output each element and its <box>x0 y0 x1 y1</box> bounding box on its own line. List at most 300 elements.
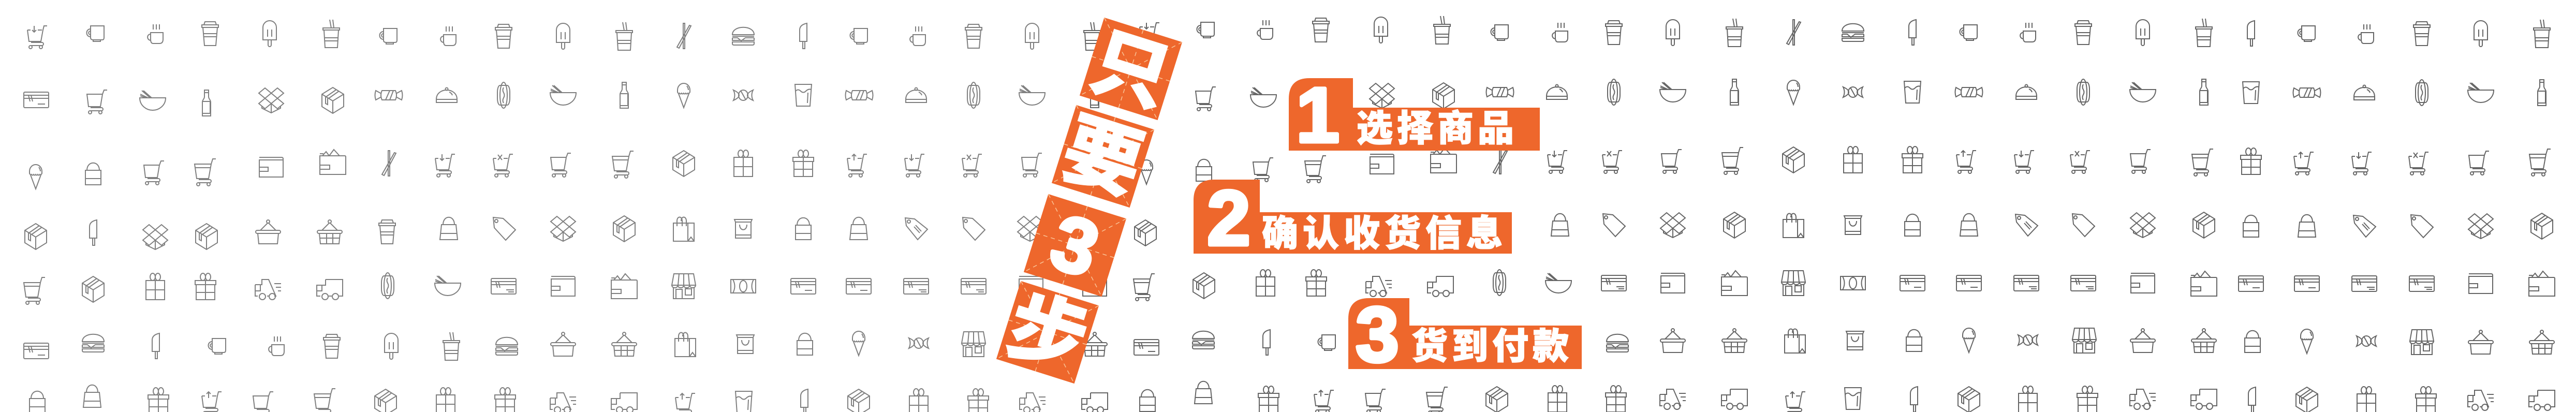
icon: grid basket <box>1722 329 1747 352</box>
icon: card <box>2409 276 2434 291</box>
icon: straw cup <box>616 22 632 50</box>
icon: bag <box>85 163 101 185</box>
icon: open box <box>1660 213 1685 238</box>
icon: card <box>1900 275 1925 291</box>
icon: pouch <box>734 219 752 238</box>
icon: cart <box>2130 150 2151 173</box>
icon: glass <box>735 391 752 412</box>
icon: cart <box>87 90 107 114</box>
icon: coffee <box>440 26 456 46</box>
icon: basket <box>2468 330 2493 354</box>
icon: cart up <box>2294 152 2314 175</box>
icon: knife <box>800 23 807 49</box>
icon: ice cream <box>852 331 865 356</box>
icon: ice cream <box>1963 328 1975 352</box>
icon: box <box>375 389 396 412</box>
icon: lined tag <box>2015 214 2038 236</box>
icon: bag <box>796 218 811 240</box>
icon: tapered bag <box>1960 214 1978 236</box>
icon: mug <box>208 339 226 354</box>
icon: box <box>848 389 870 412</box>
icon: tag <box>1603 214 1625 237</box>
icon: box <box>82 276 104 302</box>
icon: lined tag <box>2353 215 2376 237</box>
icon: large cart <box>2192 149 2213 176</box>
icon: gift with lid <box>195 273 216 300</box>
icon: fast truck <box>2468 390 2494 410</box>
icon: truck <box>317 279 343 300</box>
icon: gift with lid <box>1258 386 1279 412</box>
icon: cart <box>253 392 273 412</box>
icon: small candy <box>1843 87 1863 97</box>
icon: full wallet <box>2191 271 2217 296</box>
icon: knife <box>1909 20 1916 45</box>
icon: bag <box>1140 390 1155 411</box>
icon: cart down <box>905 154 924 177</box>
icon: paper bag <box>1783 213 1804 238</box>
icon: small candy <box>2018 335 2038 345</box>
title tile: 3 <box>1023 192 1127 299</box>
icon: card <box>961 278 986 294</box>
icon: straw cup <box>2196 19 2212 47</box>
icon: mug <box>380 28 397 44</box>
icon: gift <box>1548 386 1567 412</box>
icon: knife <box>2248 387 2256 412</box>
icon: hot dog <box>2077 79 2089 105</box>
icon: burger <box>1842 24 1864 41</box>
icon: chopsticks <box>1493 149 1507 174</box>
icon: popsicle <box>2474 21 2487 47</box>
icon: burger <box>496 337 518 355</box>
icon: paper bag <box>673 217 694 241</box>
icon: basket <box>2130 329 2155 352</box>
icon: knife <box>1263 330 1270 355</box>
icon: wallet <box>1019 276 1043 296</box>
icon: grid basket <box>2529 330 2554 354</box>
icon: candy <box>2293 88 2321 97</box>
icon: box <box>673 151 695 176</box>
icon: gift with lid <box>148 388 169 412</box>
icon: gift <box>436 388 455 412</box>
step 2 number: 2 <box>1207 174 1250 261</box>
icon: coffee <box>2020 23 2036 42</box>
icon: bag <box>797 333 813 355</box>
icon: card <box>846 278 871 294</box>
icon: to-go cup <box>379 220 395 244</box>
icon: bowl <box>1019 85 1045 105</box>
icon: cart down <box>27 26 47 49</box>
icon: truck <box>1427 276 1453 297</box>
icon: box <box>1783 147 1804 173</box>
icon: store <box>1782 271 1805 296</box>
icon: gift with lid <box>793 150 814 176</box>
icon: candy <box>1955 87 1982 97</box>
icon: cart up <box>202 392 222 412</box>
icon: pouch <box>1844 216 1862 234</box>
icon: card <box>904 278 929 294</box>
step 3 banner <box>1348 291 1582 378</box>
icon: bowl <box>435 276 461 296</box>
icon: full wallet <box>1431 148 1456 173</box>
icon: mug <box>1960 25 1977 40</box>
icon: mug <box>850 28 867 44</box>
icon: hot dog <box>381 273 394 299</box>
icon: bottle <box>1730 79 1739 105</box>
icon: basket <box>551 332 576 356</box>
icon: knife <box>801 389 808 412</box>
icon: bowl <box>1660 82 1686 102</box>
icon: open box <box>143 225 168 249</box>
icon: bowl <box>2130 82 2156 102</box>
icon: bag <box>1196 159 1212 181</box>
icon: large cart <box>612 151 634 178</box>
icon: ice cream <box>1787 80 1800 105</box>
icon: popsicle <box>1666 20 1680 46</box>
icon: to-go cup <box>965 24 982 48</box>
icon: fast truck <box>255 279 281 300</box>
icon: box <box>2193 212 2215 238</box>
icon: to-go cup <box>202 22 218 46</box>
icon: gift <box>1256 270 1275 296</box>
icon: wallet <box>259 157 283 177</box>
icon: small candy <box>2357 336 2376 346</box>
icon: store <box>962 332 985 357</box>
icon: hot dog <box>2416 80 2428 106</box>
icon: straw cup <box>1726 19 1743 47</box>
icon: knife <box>90 220 97 245</box>
icon: card <box>1601 275 1626 291</box>
icon: cart <box>2469 151 2489 175</box>
icon: glass <box>1904 81 1921 103</box>
icon: wallet <box>1370 154 1394 174</box>
icon: ice cream <box>1140 160 1153 184</box>
step 3 label: 货到付款 <box>1411 326 1569 366</box>
icon: tapered bag <box>83 385 101 407</box>
icon: grid basket <box>2191 329 2216 352</box>
icon: burger <box>732 27 754 45</box>
icon: hot dog <box>497 82 510 108</box>
title: rotated squares reading 只要3步 <box>995 16 1183 387</box>
icon: straw cup <box>2534 20 2550 48</box>
icon: tag <box>2411 215 2433 238</box>
icon: banknote <box>731 279 756 293</box>
icon: hot dog <box>1493 270 1506 296</box>
icon: bowl <box>140 91 166 110</box>
icon: straw cup <box>443 332 460 360</box>
icon: cloche <box>2354 85 2375 100</box>
icon: gift <box>734 150 753 176</box>
icon: box <box>322 87 344 113</box>
icon: bag <box>30 391 45 412</box>
icon: small candy <box>733 90 753 100</box>
icon: large cart <box>314 389 335 412</box>
icon: bowl <box>550 85 576 105</box>
icon: box <box>2531 213 2553 239</box>
icon: candy <box>375 91 403 100</box>
icon: bottle <box>1091 82 1099 108</box>
icon: knife <box>1910 387 1918 412</box>
icon: bottle <box>2200 79 2208 105</box>
icon: gift with lid <box>1306 270 1327 296</box>
icon: chopsticks <box>382 151 396 176</box>
icon: card <box>2239 276 2263 291</box>
icon: bottle <box>202 90 211 116</box>
icon: popsicle <box>1374 17 1388 43</box>
icon: tapered bag <box>440 217 458 240</box>
icon: straw cup <box>323 20 340 48</box>
icon: cart remove <box>2409 152 2428 175</box>
icon: tapered bag <box>1195 381 1212 404</box>
icon: coffee <box>2358 24 2374 43</box>
icon: lined tag <box>905 218 928 240</box>
icon: popsicle <box>385 333 398 359</box>
icon: tapered bag <box>1551 214 1569 236</box>
icon: cart <box>1253 158 1273 182</box>
icon: card <box>24 92 49 108</box>
icon: cloche <box>1547 85 1567 99</box>
icon: ice cream <box>2301 329 2313 354</box>
icon: gift <box>909 389 928 412</box>
icon: truck <box>2191 389 2217 409</box>
icon: coffee <box>148 24 163 43</box>
icon: full wallet <box>611 274 637 299</box>
icon: mug <box>1197 22 1214 38</box>
icon: popsicle <box>2136 20 2150 46</box>
icon: box <box>196 224 217 249</box>
icon: cart up <box>1786 392 1805 412</box>
icon: gift <box>2019 386 2037 412</box>
title tile: 只: 只 <box>1081 17 1181 123</box>
icon: full wallet <box>1721 271 1747 296</box>
icon: mug <box>2298 26 2315 41</box>
icon: cart <box>1365 389 1386 412</box>
icon: candy <box>1486 87 1513 97</box>
icon: fast truck <box>550 393 576 412</box>
icon: card <box>1956 275 1981 291</box>
icon: hot dog <box>967 82 980 108</box>
icon: chopsticks <box>677 23 691 49</box>
step 1 number: 1 <box>1296 71 1339 158</box>
icon: cart up <box>1314 390 1334 412</box>
icon: bowl <box>1250 87 1276 107</box>
icon: truck <box>611 393 637 412</box>
icon: cart <box>1661 150 1682 173</box>
icon: card <box>491 278 516 294</box>
step 1 label: 选择商品 <box>1357 108 1514 149</box>
icon: gift with lid <box>2077 386 2098 412</box>
icon: pouch <box>1846 331 1864 350</box>
icon: cart <box>1022 153 1042 177</box>
icon: open box <box>551 216 576 241</box>
icon: card <box>2294 276 2319 291</box>
icon: card <box>2071 275 2096 291</box>
icon: large cart <box>1426 387 1448 412</box>
icon: store <box>672 274 696 299</box>
step 1 banner <box>1289 71 1540 158</box>
icon: bottle <box>620 82 628 108</box>
icon: fast truck <box>2130 389 2156 409</box>
icon: grid basket <box>612 332 637 356</box>
icon: card <box>2352 276 2377 291</box>
step 3 number: 3 <box>1356 291 1399 378</box>
icon: fast truck <box>1366 276 1392 297</box>
icon: coffee <box>910 26 925 46</box>
icon: popsicle <box>263 21 276 47</box>
icon: full wallet <box>2529 271 2555 296</box>
icon: popsicle <box>1025 23 1039 49</box>
icon: box <box>1486 387 1508 412</box>
title tile: 要: 要 <box>1053 104 1153 211</box>
icon: pouch <box>737 335 754 354</box>
icon: bowl <box>1545 273 1571 293</box>
icon: burger <box>82 334 104 352</box>
icon: coffee <box>269 336 284 356</box>
icon: gift <box>146 273 165 300</box>
step 2 label: 确认收货信息 <box>1262 213 1503 254</box>
icon: cart remove <box>493 154 513 177</box>
icon: open box <box>2468 214 2493 239</box>
icon: gift with lid <box>1902 146 1923 173</box>
icon: cloche <box>436 88 457 102</box>
icon pattern: left half <box>24 20 1046 412</box>
icon: wallet <box>551 276 575 296</box>
icon: cart up <box>1956 151 1976 173</box>
icon: bowl <box>2468 83 2494 102</box>
icon: box <box>1433 83 1454 109</box>
icon: gift <box>2357 387 2376 412</box>
icon: hot dog <box>1608 79 1620 105</box>
icon: store <box>2072 328 2096 353</box>
icon: to-go cup <box>2413 22 2430 46</box>
icon: bag <box>2245 331 2260 352</box>
icon: straw cup <box>1084 22 1100 50</box>
icon: box <box>1193 273 1215 299</box>
icon: gift with lid <box>2416 387 2436 412</box>
icon pattern: right half <box>1082 16 2555 412</box>
icon: straw cup <box>1434 16 1450 44</box>
icon: cart down <box>1140 23 1159 46</box>
icon: paper bag <box>1785 329 1805 353</box>
icon: box <box>1724 212 1745 238</box>
icon: cart <box>144 161 164 185</box>
icon: cloche <box>2016 85 2037 99</box>
icon: banknote <box>1841 276 1865 290</box>
icon: burger <box>1193 331 1214 349</box>
icon: paper bag <box>675 332 696 357</box>
icon: mug <box>1491 25 1508 40</box>
icon: tag <box>493 217 516 240</box>
icon: gift with lid <box>2241 148 2261 174</box>
icon: basket <box>256 220 281 244</box>
icon: large cart <box>195 159 216 186</box>
icon: box <box>613 216 635 242</box>
icon: cart remove <box>962 154 982 177</box>
icon: card <box>24 343 49 359</box>
icon: open box <box>259 88 284 113</box>
icon: popsicle <box>556 23 570 49</box>
icon: bag <box>1906 330 1922 351</box>
icon: small candy <box>909 338 929 348</box>
icon: to-go cup <box>495 24 512 48</box>
icon: basket <box>1660 329 1685 352</box>
icon: cart down <box>435 154 455 177</box>
icon: cart up <box>675 393 695 412</box>
icon: wallet <box>2131 273 2155 293</box>
icon: ice cream <box>30 165 42 189</box>
icon: knife <box>152 333 159 359</box>
icon: glass <box>795 84 812 106</box>
icon: bottle <box>2538 80 2546 106</box>
title tile: 3: 3 <box>1041 197 1109 293</box>
icon: ice cream <box>678 83 690 108</box>
icon: box <box>25 224 47 249</box>
icon: wallet <box>1083 276 1107 296</box>
icon: tapered bag <box>850 217 867 240</box>
icon: to-go cup <box>1313 18 1329 42</box>
icon: card <box>2014 275 2039 291</box>
icon: wallet <box>2469 274 2493 293</box>
icon: gift with lid <box>968 389 989 412</box>
icon: cart <box>1196 87 1216 111</box>
icon: full wallet <box>320 150 346 174</box>
icon: open box <box>2130 213 2155 238</box>
step 2 banner <box>1194 174 1512 261</box>
icon: gift with lid <box>495 388 516 412</box>
icon: large cart <box>1722 148 1743 174</box>
icon: box <box>2296 387 2318 412</box>
icon: cart down <box>2014 151 2034 173</box>
icon: mug <box>87 26 104 41</box>
icon: knife <box>2247 21 2255 46</box>
icon: tag <box>2072 214 2095 237</box>
icon: gift <box>1844 146 1862 173</box>
icon: wallet <box>1661 273 1685 293</box>
icon: cloche <box>906 88 926 102</box>
icon: large cart <box>1134 274 1155 301</box>
icon: open box <box>1018 216 1042 241</box>
icon: cart <box>551 153 571 177</box>
icon: to-go cup <box>1606 21 1622 45</box>
icon: cart up <box>847 154 867 177</box>
icon: to-go cup <box>2075 21 2092 45</box>
icon: to-go cup <box>323 334 340 358</box>
icon: burger <box>1607 334 1628 352</box>
icon: tag <box>963 217 985 240</box>
icon: truck <box>1082 393 1108 412</box>
icon: open box <box>1370 83 1394 108</box>
icon: grid basket <box>1082 332 1107 356</box>
icon: bag <box>1905 214 1920 236</box>
icon: large cart <box>24 277 45 304</box>
icon: fast truck <box>1020 393 1046 412</box>
icon: large cart <box>2529 149 2551 176</box>
icon: chopsticks <box>1787 20 1801 45</box>
icon: card <box>791 278 816 294</box>
icon: cart remove <box>2070 151 2090 173</box>
icon: glass <box>1845 388 1861 409</box>
icon: card <box>1134 340 1159 355</box>
title tile: 步: 步 <box>997 280 1097 387</box>
icon: bag <box>2243 215 2259 237</box>
icon: mug <box>1318 335 1335 350</box>
icon: cart down <box>2352 152 2372 175</box>
icon: box <box>1135 220 1156 246</box>
icon: cart remove <box>1602 151 1622 173</box>
icon: candy <box>846 91 873 100</box>
icon: store <box>2410 330 2434 355</box>
icon: glass <box>2243 82 2259 104</box>
icon: truck <box>2529 390 2555 410</box>
